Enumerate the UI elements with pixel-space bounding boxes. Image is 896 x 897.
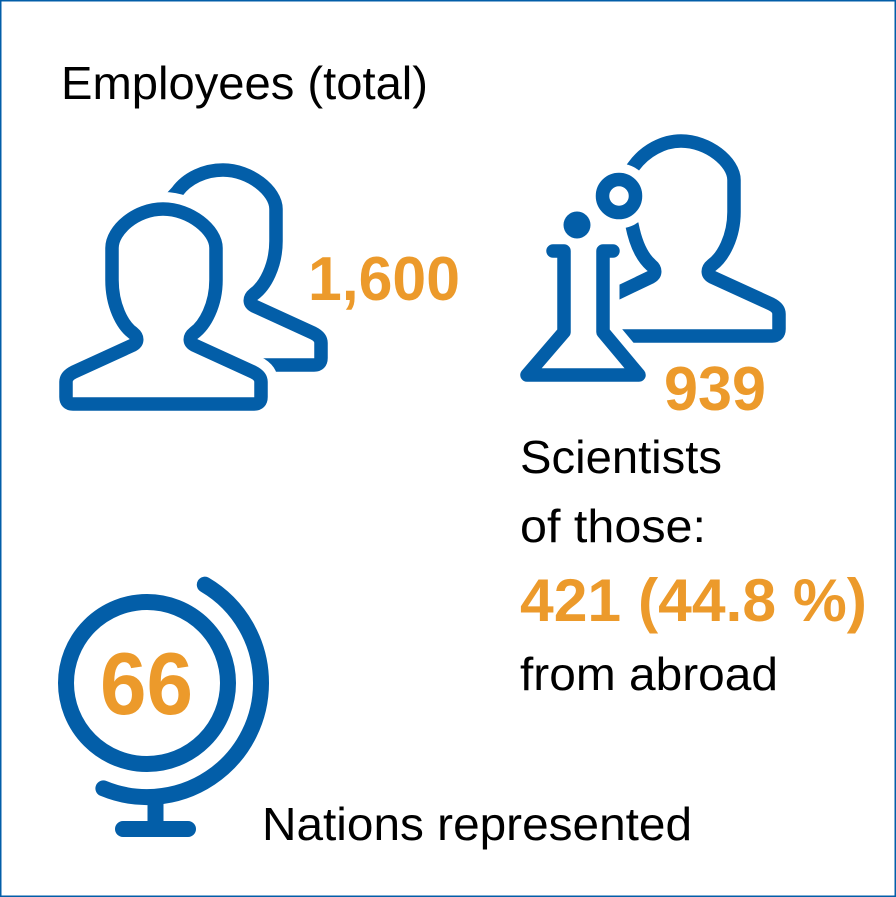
label: nations represented: Nations represented xyxy=(262,798,692,850)
heading: employees total: Employees (total) xyxy=(61,57,428,109)
number: nations: 66 xyxy=(100,634,193,733)
label: scientists: Scientists xyxy=(520,431,722,483)
number: scientists: 939 xyxy=(664,355,766,424)
number: from abroad: 421 (44.8 %) xyxy=(520,567,867,634)
icon: globe xyxy=(66,585,261,829)
label: of those: of those: xyxy=(520,500,706,552)
number: total employees: 1,600 xyxy=(308,245,460,314)
icon: scientist with flask xyxy=(527,141,779,375)
label: from abroad: from abroad xyxy=(520,648,778,700)
icon: two people xyxy=(66,170,321,404)
